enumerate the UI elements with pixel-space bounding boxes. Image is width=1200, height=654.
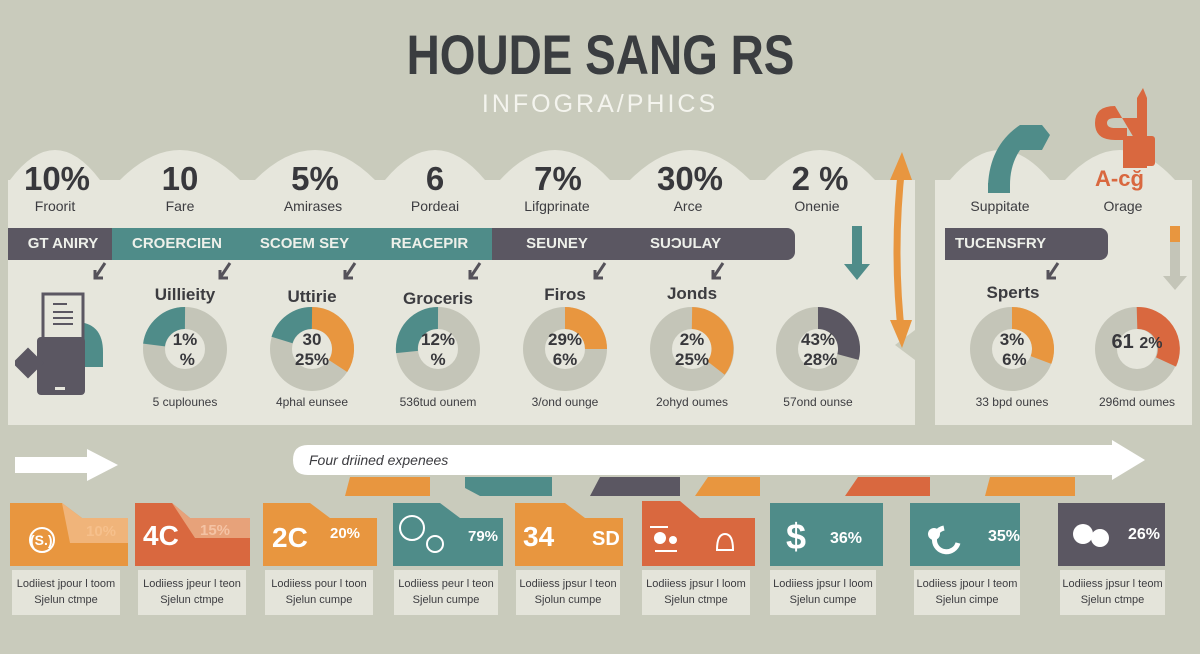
cards: 36% [830, 530, 862, 547]
icon: orange hook [1095, 88, 1155, 168]
cards: Lodiiess peur l teon [398, 578, 494, 590]
panel: main stats: Firos [544, 285, 586, 304]
arrow: long timeline: Four driined expenees [309, 452, 448, 468]
panel: main stats: Groceris [403, 289, 473, 308]
category ribbon [8, 228, 795, 260]
cards: Sjelun cumpe [790, 594, 856, 606]
panel: main stats: 536tud ounem [400, 395, 476, 409]
icon: teal down arrow [844, 226, 870, 280]
icon: grey down arrow [1163, 226, 1187, 290]
panel: main stats: % [430, 350, 446, 369]
cards: Sjelun ctmpe [664, 594, 728, 606]
panel: main stats: 2ohyd oumes [656, 395, 728, 409]
cards [10, 501, 1165, 615]
panel: main stats: 28% [803, 350, 837, 369]
panel: main stats: 5% [291, 160, 339, 197]
cards: 79% [468, 528, 498, 545]
cards: Sjelun ctmpe [34, 594, 98, 606]
panel: main stats: 30 [303, 330, 321, 349]
panel: main stats: Amirases [284, 198, 342, 214]
panel: main stats: 6 [426, 160, 444, 197]
panel: main stats: 7% [534, 160, 582, 197]
cards: 10% [86, 523, 116, 540]
panel: main stats: 1% [173, 330, 197, 349]
cards: Lodiiess jpsur l teon [519, 578, 617, 590]
panel: main stats: % [180, 350, 195, 369]
category ribbon: REACEPIR [391, 235, 468, 252]
cards: Lodiiess jpeur l teon [143, 578, 241, 590]
right ribbon [945, 228, 1108, 260]
panel: main stats: 2% [680, 330, 704, 349]
cards: 35% [988, 528, 1020, 545]
panel: main stats: Sperts [987, 283, 1039, 302]
panel: main stats: 57ond ounse [783, 395, 853, 409]
panel: main stats: 25% [675, 350, 709, 369]
cards: (S.) [30, 532, 53, 548]
subtitle: INFOGRA/PHICS [482, 90, 718, 118]
panel: main stats: Pordeai [411, 198, 459, 214]
right ribbon: TUCENSFRY [955, 235, 1046, 252]
panel: main stats: 61 2% [1112, 331, 1162, 353]
cards: $ [786, 516, 806, 557]
donut charts: Uillieity [155, 285, 215, 304]
panel: main stats: Jonds [667, 284, 717, 303]
panel: main stats: Froorit [35, 198, 75, 214]
cards: Lodiiess jpour l teom [917, 578, 1017, 590]
icon: teal curved arrow [988, 125, 1050, 193]
panel: main stats: 5 cuplounes [153, 395, 217, 409]
stat numbers: 10% [24, 160, 90, 197]
panel: main stats: Onenie [794, 198, 840, 214]
orange label: A-cğ [1095, 166, 1144, 191]
icon: phone [15, 292, 103, 395]
panel: main stats: 3/ond ounge [532, 395, 598, 409]
panel: main stats: Lifgprinate [524, 198, 590, 214]
category ribbon: SCOEM SEY [260, 235, 349, 252]
panel: main stats: Fare [166, 198, 194, 214]
arrow: small white [15, 449, 118, 481]
cards: Lodiiess jpsur l teom [1062, 578, 1163, 590]
cards: Sjelun cumpe [413, 594, 479, 606]
cards: 34 [523, 521, 554, 552]
arrow: long timeline [293, 440, 1145, 496]
cards: Lodiiess pour l toon [271, 578, 367, 590]
category ribbon: GT ANIRY [28, 235, 98, 252]
category ribbon: CROERCIEN [132, 235, 222, 252]
cards: Sjelun cumpe [286, 594, 352, 606]
cards: 26% [1128, 526, 1160, 543]
category ribbon: SEUNEY [526, 235, 588, 252]
cards: Lodiiess jpsur l loom [646, 578, 746, 590]
panel: main stats: Arce [674, 198, 702, 214]
icon: orange double arrow [890, 152, 912, 348]
panel: main stats: 2 % [792, 160, 848, 197]
small arrows [94, 262, 1060, 280]
panel: main stats: 25% [295, 350, 329, 369]
panel: main stats: 33 bpd ounes [976, 395, 1048, 409]
cards: Sjelun ctmpe [160, 594, 224, 606]
cards: Sjelun cimpe [936, 594, 998, 606]
cards: Sjelun ctmpe [1081, 594, 1144, 606]
panel: main stats: 29% [548, 330, 582, 349]
panel: main stats: 6% [553, 350, 577, 369]
panel: main stats: Orage [1104, 198, 1142, 214]
cards: 2C [272, 522, 308, 553]
panel: main stats: 12% [421, 330, 455, 349]
cards: 15% [200, 522, 230, 539]
panel: main stats: Suppitate [970, 198, 1030, 214]
panel: main stats: 43% [801, 330, 835, 349]
panel: main stats: 6% [1002, 350, 1027, 369]
panel: main stats: 3% [1000, 330, 1024, 349]
panel: main stats [8, 150, 1192, 425]
cards: 4C [143, 520, 179, 551]
panel: main stats: Uttirie [287, 287, 337, 306]
cards: Sjolun cumpe [535, 594, 601, 606]
cards: Lodiiest jpour l toom [17, 578, 115, 590]
panel: main stats: 4phal eunsee [276, 395, 348, 409]
category ribbon: SUƆULAY [650, 235, 721, 252]
cards: Lodiiess jpsur l loom [773, 578, 873, 590]
cards: 20% [330, 525, 360, 542]
panel: main stats: 296md oumes [1099, 395, 1175, 409]
panel: main stats: 30% [657, 160, 723, 197]
cards: SD [592, 528, 620, 550]
panel: main stats: 10 [162, 160, 198, 197]
title: HOUDE SANG RS [406, 23, 794, 86]
